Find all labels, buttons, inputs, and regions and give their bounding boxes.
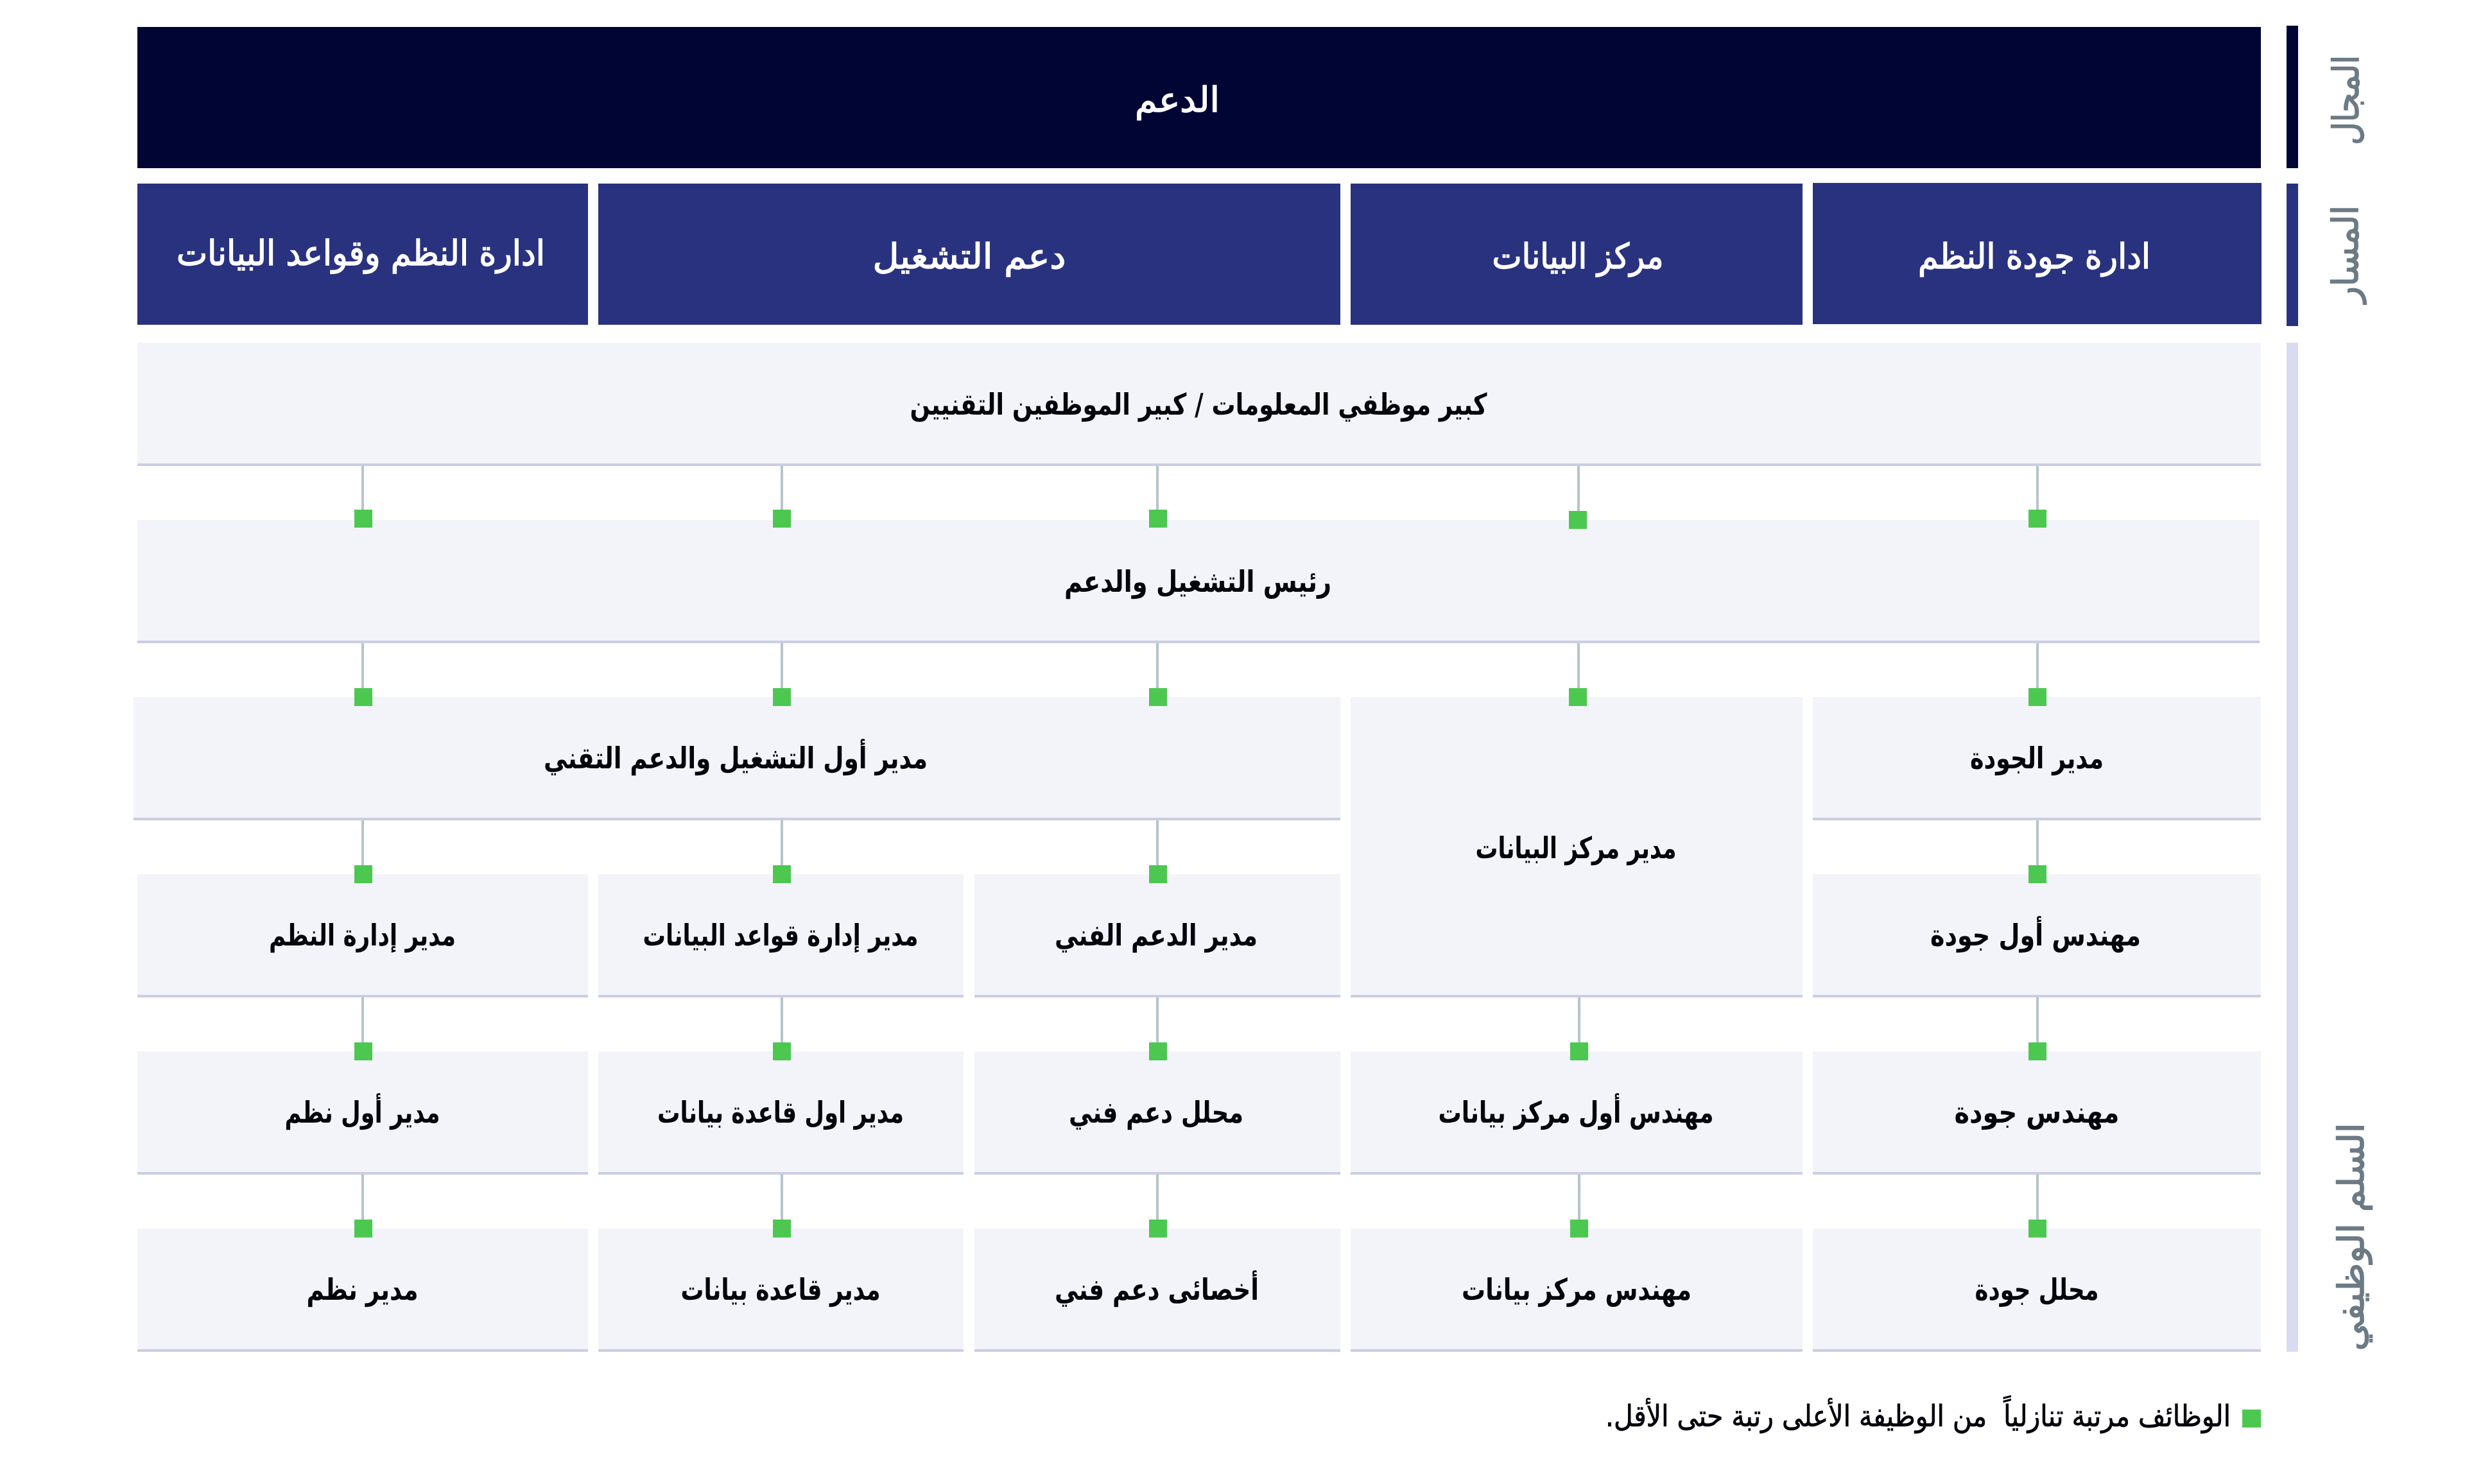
track header: systems quality management	[1813, 183, 2262, 324]
side label: career ladder: السلم الوظيفي	[2331, 1123, 2373, 1350]
role: senior systems manager: مدير أول نظم	[285, 1093, 440, 1130]
role: database management manager: مدير إدارة قواعد البيانات	[643, 918, 918, 953]
panel: domain banner	[137, 27, 2261, 168]
role: data center manager: مدير مركز البيانات	[1475, 831, 1677, 865]
role: technical support specialist: أخصائى دعم فني	[1055, 1270, 1259, 1307]
role: systems management manager	[137, 874, 588, 997]
panel: domain banner: الدعم	[1135, 80, 1220, 120]
connectors: row 5 to row 6	[361, 1175, 2039, 1221]
role: quality engineer	[1813, 1051, 2261, 1175]
role: database manager: مدير قاعدة بيانات	[680, 1272, 881, 1307]
side label: career ladder	[2287, 343, 2373, 1352]
role: database management manager	[598, 874, 964, 997]
markers: row 3	[354, 688, 2046, 706]
role: senior manager operations and technical support	[134, 697, 1340, 820]
markers: row 4	[354, 865, 2046, 883]
role: data center engineer: مهندس مركز بيانات	[1462, 1272, 1691, 1307]
role: technical support analyst: محلل دعم فني	[1069, 1095, 1243, 1130]
role: senior database manager: مدير اول قاعدة بيانات	[657, 1095, 904, 1130]
track header: systems and databases management: ادارة النظم وقواعد البيانات	[177, 233, 545, 273]
role: senior manager operations and technical support: مدير أول التشغيل والدعم التقني	[544, 739, 928, 775]
connectors: row 3 to row 4	[361, 820, 2039, 867]
markers: row 5	[354, 1042, 2046, 1060]
role: head of operations and support	[137, 520, 2260, 643]
markers: row 2	[354, 510, 2046, 529]
role: technical support specialist	[974, 1229, 1340, 1352]
track header: systems quality management: ادارة جودة النظم	[1918, 236, 2150, 277]
role: quality manager	[1813, 697, 2261, 820]
track header: operations support	[598, 184, 1340, 325]
role: systems manager	[137, 1229, 588, 1352]
role: quality manager: مدير الجودة	[1970, 741, 2104, 775]
connectors: row 4 to row 5	[361, 997, 2039, 1044]
role: senior data center engineer	[1351, 1051, 1803, 1175]
connectors: row 1 to row 2	[361, 466, 2039, 511]
role: senior quality engineer: مهندس أول جودة	[1930, 916, 2141, 953]
role: quality engineer: مهندس جودة	[1954, 1095, 2120, 1130]
role: head of operations and support: رئيس التشغيل والدعم	[1064, 564, 1331, 599]
role: database manager	[598, 1229, 964, 1352]
role: chief information officer / chief technology staff: كبير موظفي المعلومات / كبير الموظفين التقنيين	[910, 387, 1487, 422]
track header: data center	[1351, 184, 1803, 325]
track header: operations support: دعم التشغيل	[873, 236, 1066, 277]
side label: domain	[2287, 26, 2367, 168]
role: data center engineer	[1351, 1229, 1803, 1352]
role: chief information officer / chief technology staff	[137, 343, 2261, 466]
role: senior systems manager	[137, 1051, 588, 1175]
side label: domain: المجال	[2326, 55, 2367, 145]
connectors: row 2 to row 3	[361, 643, 2039, 689]
role: senior quality engineer	[1813, 874, 2261, 997]
role: quality analyst	[1813, 1229, 2261, 1352]
track header: data center: مركز البيانات	[1492, 236, 1664, 277]
footnote with green marker: الوظائف مرتبة تنازلياً من الوظيفة الأعلى رتبة حتى الأقل.	[1605, 1395, 2231, 1434]
role: systems management manager: مدير إدارة النظم	[269, 918, 456, 953]
markers: row 6	[354, 1220, 2046, 1238]
role: senior database manager	[598, 1051, 964, 1175]
role: systems manager: مدير نظم	[307, 1272, 419, 1307]
role: technical support manager	[974, 874, 1340, 997]
role: data center manager	[1351, 697, 1803, 997]
role: technical support manager: مدير الدعم الفني	[1055, 918, 1258, 953]
side label: track	[2287, 184, 2367, 326]
role: technical support analyst	[974, 1051, 1340, 1175]
side label: track: المسار	[2325, 205, 2367, 305]
role: quality analyst: محلل جودة	[1975, 1272, 2099, 1307]
role: senior data center engineer: مهندس أول مركز بيانات	[1438, 1093, 1714, 1130]
track header: systems and databases management	[137, 184, 588, 325]
